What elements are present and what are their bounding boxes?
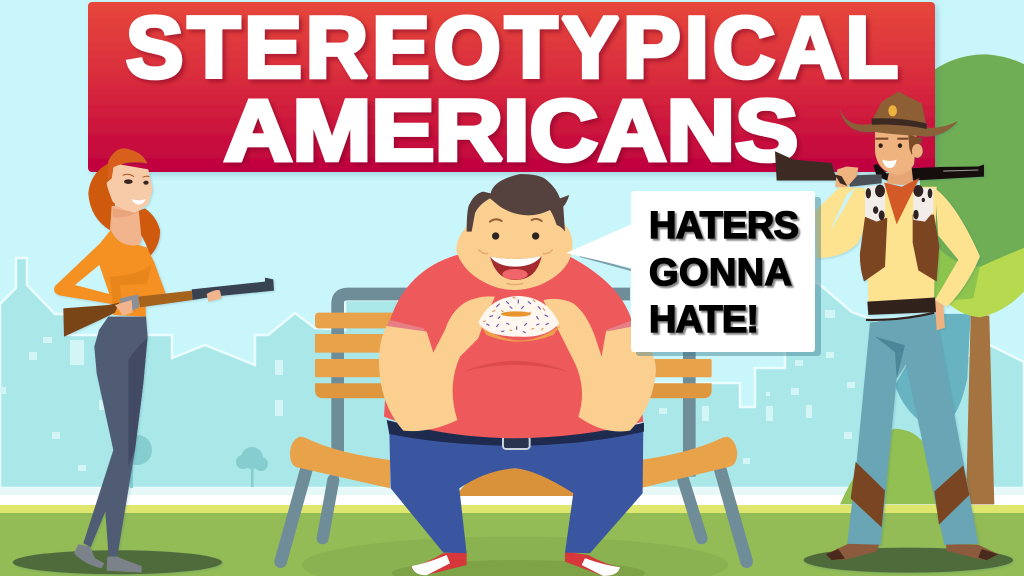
shadow under man and bench <box>302 537 728 576</box>
belt and buckle <box>387 420 644 449</box>
bandana <box>884 178 919 224</box>
sneakers <box>74 544 142 573</box>
face <box>107 163 153 213</box>
head <box>456 174 572 290</box>
title text: STEREOTYPICAL <box>126 0 898 96</box>
bubble text: HATE! <box>649 299 759 341</box>
eyes <box>492 232 499 240</box>
bench <box>281 294 747 576</box>
raised arm <box>815 187 868 258</box>
cowboy hat <box>839 92 958 137</box>
cowhide yoke <box>865 185 933 222</box>
ground: kerb and grass <box>0 488 1024 576</box>
black rifle barrel <box>873 164 984 182</box>
title text: AMERICANS <box>224 83 798 179</box>
trousers <box>847 312 978 545</box>
neck <box>887 168 913 185</box>
ground shadow <box>13 550 222 574</box>
jeans <box>389 430 643 553</box>
bubble pointer <box>566 224 632 268</box>
city skyline <box>0 258 1024 488</box>
hair top <box>107 148 147 179</box>
title text <box>126 0 898 179</box>
sprinkles <box>487 300 548 333</box>
hip arm <box>935 188 980 307</box>
rifle stock, receiver and hand <box>775 151 882 187</box>
shoes <box>412 552 620 576</box>
seated man eating a donut <box>379 174 656 576</box>
leggings <box>83 317 148 557</box>
orange top <box>54 230 166 317</box>
tree on the right <box>840 54 1024 504</box>
face features <box>123 174 149 204</box>
head <box>875 132 923 175</box>
title banner <box>88 0 935 179</box>
distant tree <box>122 435 268 488</box>
sleeves <box>387 320 633 335</box>
donut <box>478 296 561 342</box>
chaps <box>851 462 969 527</box>
bubble text <box>649 205 799 341</box>
mouth <box>490 256 542 280</box>
speech bubble <box>566 191 821 356</box>
boots <box>826 544 998 560</box>
arms and hands <box>379 296 656 431</box>
woman with rifle <box>13 148 274 574</box>
bubble text: HATERS <box>649 205 799 247</box>
rifle <box>63 278 274 337</box>
vest <box>860 215 939 281</box>
hair back <box>88 163 160 256</box>
bubble text: GONNA <box>649 252 792 294</box>
red shirt <box>384 255 643 438</box>
belt and rope <box>866 297 936 320</box>
neck <box>110 206 142 247</box>
shirt torso <box>867 187 937 302</box>
cowboy with rifle <box>775 92 1013 573</box>
ground shadow <box>804 548 1013 573</box>
